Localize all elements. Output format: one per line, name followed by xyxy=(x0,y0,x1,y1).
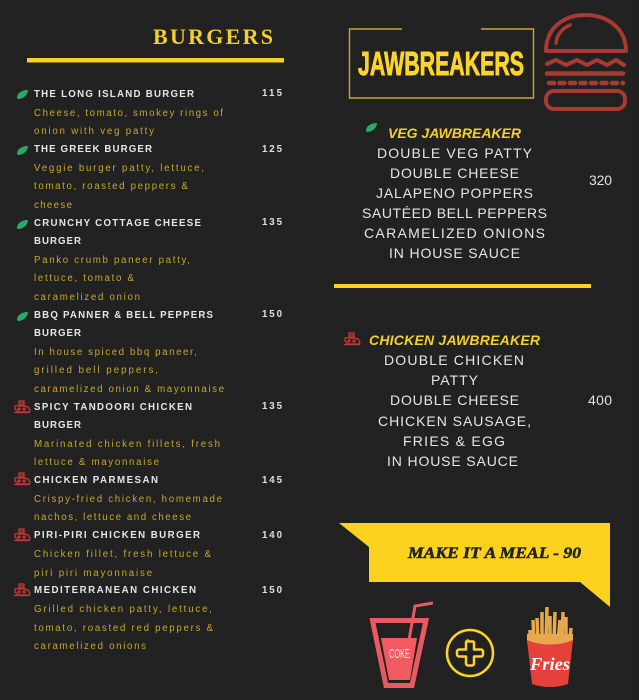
menu item: bbq panner and bell peppers burger: BBQ PANNER & BELL PEPPERS xyxy=(34,310,214,321)
menu item: piri-piri chicken burger: PIRI-PIRI CHICKEN BURGER xyxy=(34,530,200,541)
veg jawbreaker heading: VEG JAWBREAKER xyxy=(388,125,522,141)
chicken jawbreaker ingredients: PATTY xyxy=(431,372,479,388)
menu item: spicy tandoori chicken burger: 135 xyxy=(262,401,283,412)
menu item: spicy tandoori chicken burger: Marinated chicken fillets, fresh xyxy=(34,439,220,450)
veg jawbreaker ingredients: CARAMELIZED ONIONS xyxy=(364,225,545,241)
chicken jawbreaker heading: CHICKEN JAWBREAKER xyxy=(369,332,541,348)
icon: chicken xyxy=(344,333,360,344)
banner: make it a meal xyxy=(339,523,610,607)
menu item: the greek burger xyxy=(17,144,283,211)
panel: veg jawbreaker xyxy=(362,123,612,261)
heading: burgers: BURGERS xyxy=(153,24,273,49)
icon: coke cup xyxy=(372,603,433,686)
veg jawbreaker price: 320 xyxy=(589,172,612,188)
panel: jawbreakers title xyxy=(350,29,534,98)
menu item: bbq panner and bell peppers burger: caramelized onion & mayonnaise xyxy=(34,384,224,395)
menu item: the greek burger: tomato, roasted peppers & xyxy=(34,181,189,192)
menu item: crunchy cottage cheese burger: caramelized onion xyxy=(34,292,140,303)
icon: leaf xyxy=(366,123,377,132)
icon: coke cup: COKE xyxy=(389,646,410,661)
menu item: the greek burger: cheese xyxy=(34,200,72,211)
menu item: spicy tandoori chicken burger: SPICY TANDOORI CHICKEN xyxy=(34,402,192,413)
section divider xyxy=(334,284,591,288)
menu item: the greek burger: THE GREEK BURGER xyxy=(34,144,152,155)
chicken jawbreaker ingredients: DOUBLE CHEESE xyxy=(390,392,519,408)
menu item: chicken parmesan: Crispy-fried chicken, homemade xyxy=(34,494,222,505)
menu item: chicken parmesan xyxy=(14,473,283,523)
chicken jawbreaker price: 400 xyxy=(588,392,612,408)
menu item: piri-piri chicken burger: piri piri mayonnaise xyxy=(34,568,152,579)
menu item: mediterranean chicken xyxy=(14,584,282,652)
menu item: crunchy cottage cheese burger: CRUNCHY COTTAGE CHEESE xyxy=(34,218,202,229)
menu item: bbq panner and bell peppers burger: In house spiced bbq paneer, xyxy=(34,347,197,358)
chicken jawbreaker ingredients xyxy=(378,352,531,469)
menu item: the long island burger: onion with veg patty xyxy=(34,126,154,137)
menu item: bbq panner and bell peppers burger: grilled bell peppers, xyxy=(34,365,158,376)
banner: make it a meal: MAKE IT A MEAL - 90 xyxy=(407,545,581,562)
menu item: spicy tandoori chicken burger: BURGER xyxy=(34,420,81,431)
menu item: the long island burger: Cheese, tomato, smokey rings of xyxy=(34,108,223,119)
menu item: bbq panner and bell peppers burger xyxy=(17,309,282,395)
icon: fries xyxy=(527,607,573,687)
chicken jawbreaker ingredients: DOUBLE CHICKEN xyxy=(384,352,524,368)
chicken jawbreaker ingredients: CHICKEN SAUSAGE, xyxy=(378,413,531,429)
veg jawbreaker ingredients: SAUTÉED BELL PEPPERS xyxy=(362,205,547,221)
menu item: mediterranean chicken: MEDITERRANEAN CHICKEN xyxy=(34,585,196,596)
menu item: mediterranean chicken: 150 xyxy=(262,585,282,596)
menu item: crunchy cottage cheese burger: lettuce, tomato & xyxy=(34,273,135,284)
panel: chicken jawbreaker xyxy=(344,332,612,469)
menu item: piri-piri chicken burger: 140 xyxy=(262,530,282,541)
icon: fries: Fries xyxy=(529,654,570,674)
menu item: spicy tandoori chicken burger xyxy=(14,401,283,468)
heading underline xyxy=(27,58,284,62)
menu item: bbq panner and bell peppers burger: 150 xyxy=(262,309,282,320)
menu item: the long island burger: 115 xyxy=(262,88,283,99)
veg jawbreaker ingredients: JALAPENO POPPERS xyxy=(376,185,533,201)
menu item: mediterranean chicken: Grilled chicken patty, lettuce, xyxy=(34,604,212,615)
menu item: spicy tandoori chicken burger: lettuce & mayonnaise xyxy=(34,457,159,468)
menu item: crunchy cottage cheese burger xyxy=(17,217,283,303)
veg jawbreaker ingredients: DOUBLE VEG PATTY xyxy=(377,145,533,161)
menu item: crunchy cottage cheese burger: Panko crumb paneer patty, xyxy=(34,255,190,266)
menu item: bbq panner and bell peppers burger: BURGER xyxy=(34,328,81,339)
chicken jawbreaker ingredients: IN HOUSE SAUCE xyxy=(387,453,518,469)
title: JAWBREAKERS xyxy=(358,45,524,82)
menu item: mediterranean chicken: caramelized onions xyxy=(34,641,146,652)
menu item: mediterranean chicken: tomato, roasted red peppers & xyxy=(34,623,214,634)
menu item: piri-piri chicken burger: Chicken fillet, fresh lettuce & xyxy=(34,549,212,560)
menu item: the greek burger: 125 xyxy=(262,144,283,155)
menu item: chicken parmesan: nachos, lettuce and cheese xyxy=(34,512,191,523)
menu item: crunchy cottage cheese burger: 135 xyxy=(262,217,283,228)
panel: burgers menu xyxy=(14,24,284,652)
veg jawbreaker ingredients xyxy=(362,145,547,261)
menu item: the greek burger: Veggie burger patty, lettuce, xyxy=(34,163,204,174)
icon: burger xyxy=(546,15,626,109)
menu item: piri-piri chicken burger xyxy=(14,529,282,579)
icon: plus xyxy=(447,630,493,676)
menu item: the long island burger: THE LONG ISLAND BURGER xyxy=(34,89,194,100)
veg jawbreaker ingredients: DOUBLE CHEESE xyxy=(390,165,519,181)
menu item: crunchy cottage cheese burger: BURGER xyxy=(34,236,81,247)
veg jawbreaker ingredients: IN HOUSE SAUCE xyxy=(389,245,520,261)
chicken jawbreaker ingredients: FRIES & EGG xyxy=(403,433,505,449)
menu item: chicken parmesan: CHICKEN PARMESAN xyxy=(34,475,158,486)
menu item: chicken parmesan: 145 xyxy=(262,475,283,486)
title frame xyxy=(350,29,534,98)
menu item: the long island burger xyxy=(17,88,283,137)
